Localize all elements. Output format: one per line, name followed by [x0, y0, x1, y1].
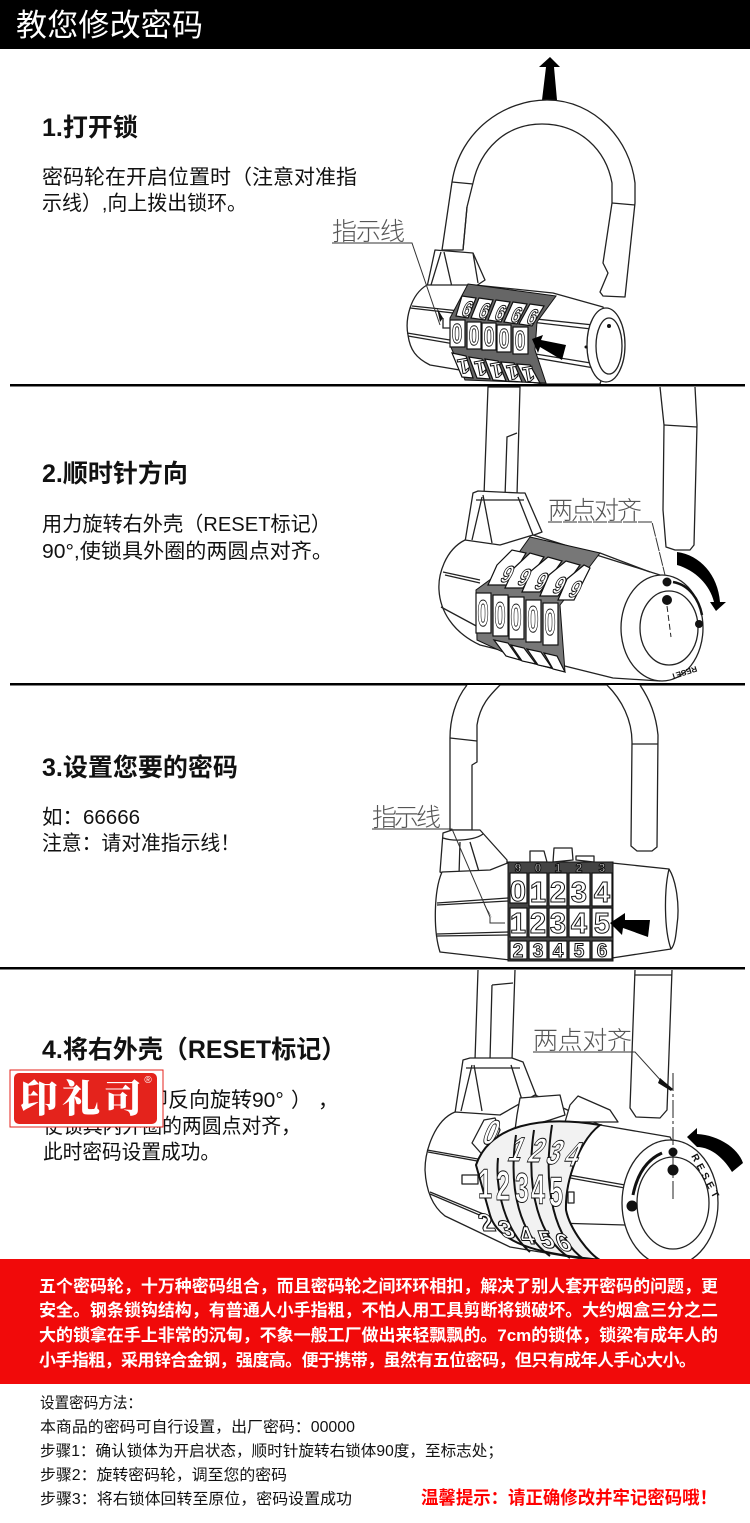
step 2 description [42, 513, 333, 563]
step 4 description: 此时密码设置成功。 [43, 1141, 220, 1164]
step 3 description [42, 806, 240, 855]
step 4 description: ， [318, 1089, 338, 1112]
illustration: lock opening with shackle pulled up: 0 [515, 325, 525, 357]
step 3 heading: 3.设置您要的密码 [42, 753, 238, 782]
illustration: lock opening with shackle pulled up: 1 [504, 359, 520, 384]
illustration: rotating right shell clockwise: 0 [544, 603, 556, 644]
password setting instructions: 本商品的密码可自行设置，出厂密码：00000 [40, 1418, 355, 1436]
password setting instructions: 步骤3：将右锁体回转至原位，密码设置成功 [40, 1490, 352, 1508]
illustration: rotating right shell clockwise: 9 [530, 568, 553, 594]
wheels [508, 862, 613, 961]
illustration: lock opening with shackle pulled up: 1 [520, 361, 536, 386]
illustration: setting the code: 3 [599, 861, 606, 875]
illustration: rotating shell back: 5 [534, 1225, 559, 1254]
stamp logo: 印礼司 [20, 1068, 142, 1123]
illustration: setting the code: 4 [594, 877, 610, 909]
illustration: rotating shell back: 4 [531, 1168, 546, 1214]
illustration: rotating right shell clockwise: RESET [670, 664, 698, 681]
illustration: lock opening with shackle pulled up [332, 57, 635, 386]
divider 1 [10, 384, 745, 386]
illustration: setting the code: 3 [533, 941, 543, 962]
illustration: rotating shell back: 2 [523, 1131, 552, 1170]
password setting instructions: 步骤1：确认锁体为开启状态，顺时针旋转右锁体90度，至标志处； [40, 1442, 503, 1460]
wheels [472, 1118, 500, 1160]
illustration: rotating right shell clockwise: 0 [477, 594, 489, 635]
illustration: setting the code: 0 [510, 876, 526, 908]
step 4 description: ） [291, 1089, 312, 1112]
illustration: rotating shell back: 6 [551, 1228, 576, 1257]
illustration: lock opening with shackle pulled up: 6 [458, 298, 476, 321]
step 2 description: 用力旋转右外壳（RESET标记） [42, 513, 331, 536]
illustration: setting the code: 1 [555, 861, 562, 875]
illustration: rotating right shell clockwise: 9 [496, 561, 519, 587]
illustration: setting the code: 4 [553, 941, 564, 962]
illustration: setting the code: 5 [594, 908, 610, 940]
step 1 description: 示线）,向上拨出锁环。 [42, 192, 247, 215]
illustration: rotating right shell clockwise: 0 [510, 598, 522, 639]
illustration: lock opening with shackle pulled up: 0 [469, 320, 479, 352]
illustration: rotating right shell clockwise: 9 [513, 564, 536, 590]
illustration: setting the code: 6 [597, 941, 607, 962]
icon: counter-clockwise curved arrow [687, 1128, 743, 1172]
step 3 description: 如：66666 [42, 806, 140, 829]
illustration: rotating shell back: 4 [514, 1221, 540, 1250]
step 4 heading: 4.将右外壳（RESET标记） [42, 1036, 346, 1064]
illustration: rotating shell back: 3 [515, 1166, 529, 1212]
step 1 description [42, 166, 357, 215]
illustration: setting the code: 0 [535, 861, 542, 875]
red feature panel: 安全。钢条锁钩结构，有普通人小手指粗，不怕人用工具剪断将锁破坏。大约烟盒三分之二 [39, 1300, 718, 1320]
illustration: rotating shell back [425, 970, 743, 1266]
step 3 description: 注意：请对准指示线！ [42, 832, 240, 855]
wheels [450, 284, 556, 383]
red reminder: 温馨提示：请正确修改并牢记密码哦！ [421, 1487, 717, 1508]
illustration: setting the code: 2 [576, 861, 583, 875]
illustration: rotating right shell clockwise [439, 387, 726, 681]
password setting instructions: 步骤2：旋转密码轮，调至您的密码 [40, 1466, 287, 1484]
icon: up arrow [539, 57, 560, 100]
illustration: rotating shell back: 3 [494, 1215, 519, 1244]
illustration: setting the code: 9 [515, 861, 522, 875]
illustration: rotating shell back: 3 [541, 1133, 570, 1172]
illustration: setting the code: 1 [530, 877, 546, 909]
wheels [476, 537, 600, 672]
illustration: lock opening with shackle pulled up: 1 [472, 355, 488, 380]
step 1 description: 密码轮在开启位置时（注意对准指 [42, 166, 357, 189]
step 4 description: 逆时针转（即反向旋转90° [42, 1089, 284, 1112]
illustration: rotating shell back: 1 [503, 1130, 532, 1169]
illustration: rotating shell back: 1 [478, 1162, 492, 1208]
illustration: setting the code: 5 [574, 941, 585, 962]
divider 3 [0, 967, 745, 970]
illustration: setting the code [372, 685, 678, 962]
illustration: rotating shell back: 2 [496, 1164, 510, 1210]
illustration: setting the code: 1 [510, 908, 526, 940]
illustration: rotating shell back: RESET [688, 1152, 721, 1200]
label: indicator line: 指示线 [332, 218, 405, 246]
red feature panel [0, 1259, 750, 1384]
step 4 description: 使锁具内外圈的两圆点对齐， [43, 1115, 301, 1138]
illustration: setting the code: 2 [530, 908, 546, 940]
illustration: setting the code: 3 [550, 908, 566, 940]
illustration: rotating right shell clockwise: 9 [548, 572, 571, 598]
illustration: lock opening with shackle pulled up: 0 [452, 318, 462, 350]
red feature panel: 小手指粗，采用锌合金钢，强度高。便于携带，虽然有五位密码，但只有成年人手心大小。 [39, 1350, 696, 1370]
label: two dots aligned: 两点对齐 [533, 1027, 632, 1055]
icon: pointer arrow [532, 335, 566, 360]
label: two dots aligned [548, 497, 665, 575]
red feature panel: 大的锁拿在手上非常的沉甸，不象一般工厂做出来轻飘飘的。7cm的锁体，锁梁有成年人的 [39, 1325, 718, 1345]
illustration: lock opening with shackle pulled up: 6 [523, 306, 541, 329]
illustration: rotating shell back: 0 [477, 1113, 506, 1152]
illustration: setting the code: 4 [571, 908, 587, 940]
illustration: rotating right shell clockwise: 0 [527, 600, 539, 641]
label: two dots aligned [533, 1027, 673, 1091]
illustration: lock opening with shackle pulled up: 0 [499, 323, 509, 355]
illustration: rotating right shell clockwise: 0 [494, 596, 506, 637]
label: two dots aligned: 两点对齐 [548, 497, 642, 525]
illustration: lock opening with shackle pulled up: 1 [488, 357, 504, 382]
icon: pointer arrow [610, 913, 650, 937]
title bar [0, 0, 750, 49]
illustration: lock opening with shackle pulled up: 6 [475, 300, 493, 323]
divider 2 [10, 683, 745, 686]
label: indicator line [372, 804, 505, 923]
illustration: rotating shell back: 5 [549, 1170, 563, 1216]
step 2 description: 90°,使锁具外圈的两圆点对齐。 [42, 540, 333, 563]
step 4 description [42, 1089, 338, 1164]
illustration: lock opening with shackle pulled up: 0 [484, 321, 494, 353]
illustration: lock opening with shackle pulled up: 6 [507, 304, 525, 327]
illustration: rotating shell back: 4 [559, 1135, 589, 1174]
title bar: 教您修改密码 [16, 8, 203, 43]
password setting instructions: 设置密码方法： [40, 1394, 142, 1412]
illustration: rotating right shell clockwise: 9 [564, 576, 587, 602]
step 2 heading: 2.顺时针方向 [42, 459, 188, 488]
red feature panel: 五个密码轮，十万种密码组合，而且密码轮之间环环相扣，解决了别人套开密码的问题，更 [39, 1276, 718, 1296]
label: indicator line [332, 218, 450, 328]
stamp logo: ® [144, 1075, 152, 1086]
illustration: rotating shell back: 2 [474, 1208, 499, 1237]
label: indicator line: 指示线 [372, 804, 441, 832]
password setting instructions [40, 1394, 503, 1508]
step 1 heading: 1.打开锁 [42, 114, 138, 142]
illustration: lock opening with shackle pulled up: 1 [455, 353, 471, 378]
illustration: setting the code: 2 [513, 941, 523, 962]
illustration: setting the code: 2 [550, 877, 566, 909]
icon: clockwise curved arrow [677, 552, 726, 611]
illustration: lock opening with shackle pulled up: 6 [491, 302, 509, 325]
illustration: setting the code: 3 [571, 877, 587, 909]
